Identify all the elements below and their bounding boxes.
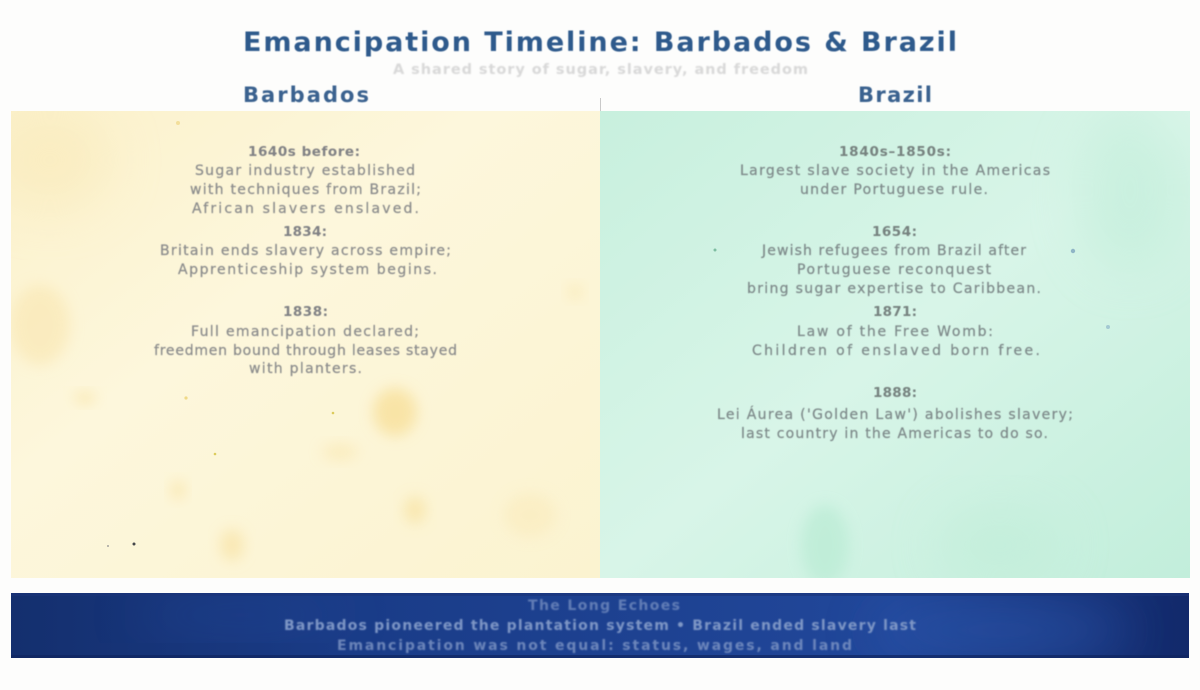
timeline: Brazil 1654: Jewish refugees from Brazil after [761,243,1026,259]
timeline: Brazil 1840s: under Portuguese rule. [800,182,988,198]
timeline: Brazil 1654: bring sugar expertise to Caribbean. [747,281,1041,297]
banner text [284,598,916,654]
timeline: Barbados 1838: Full emancipation declared; [191,324,419,340]
timeline: Barbados 1838: with planters. [249,361,362,377]
timeline: Barbados 1640s: 1640s before: [248,144,360,160]
timeline: Barbados 1640s: with techniques from Brazil; [190,182,421,198]
timeline: Brazil 1888: Lei Áurea ('Golden Law') abolishes slavery; [717,406,1073,423]
timeline: Brazil 1840s: 1840s–1850s: [839,144,951,160]
timeline: Brazil 1888 [717,385,1073,442]
panel: bottom banner [11,593,1189,658]
timeline: Barbados 1834: 1834: [283,224,327,240]
timeline: Barbados 1838: freedmen bound through leases stayed [154,343,457,359]
banner text: Barbados pioneered the plantation system • Brazil ended slavery last [284,618,916,634]
timeline: Brazil 1888: last country in the Americas to do so. [741,426,1048,442]
timeline: Barbados 1640s [190,144,421,217]
timeline: Barbados 1640s: Sugar industry established [195,163,415,179]
banner text: The Long Echoes [528,598,680,614]
banner text: Emancipation was not equal: status, wages, and land [337,638,852,654]
timeline: Barbados 1838 [154,304,457,377]
timeline: Brazil 1654: Portuguese reconquest [797,262,992,278]
heading: Brazil: Brazil [858,83,932,107]
timeline: Brazil 1871: 1871: [873,304,917,320]
timeline: Brazil 1654 [747,224,1041,297]
timeline: Brazil 1871: Children of enslaved born free. [752,343,1040,359]
timeline: Barbados 1640s: African slavers enslaved. [192,201,419,217]
timeline: Barbados 1838: 1838: [283,304,328,320]
timeline: Brazil 1888: 1888: [873,385,917,401]
panel: Barbados [0,110,600,578]
timeline: Brazil 1840s: Largest slave society in the Americas [740,163,1050,179]
timeline: Barbados 1834: Britain ends slavery across empire; [160,243,451,259]
timeline: Brazil 1871 [752,304,1040,359]
timeline: Brazil 1654: 1654: [872,224,917,240]
heading: Barbados: Barbados [243,83,369,107]
timeline: Barbados 1834: Apprenticeship system begins. [178,262,437,278]
timeline: Brazil 1840s [740,144,1050,198]
timeline: Brazil 1871: Law of the Free Womb: [797,324,993,340]
timeline: Barbados 1834 [160,224,451,278]
title: Emancipation Timeline: Barbados & Brazil [243,27,957,58]
subtitle: A shared story of sugar, slavery, and freedom [393,62,808,78]
panel: Brazil [600,110,1190,585]
